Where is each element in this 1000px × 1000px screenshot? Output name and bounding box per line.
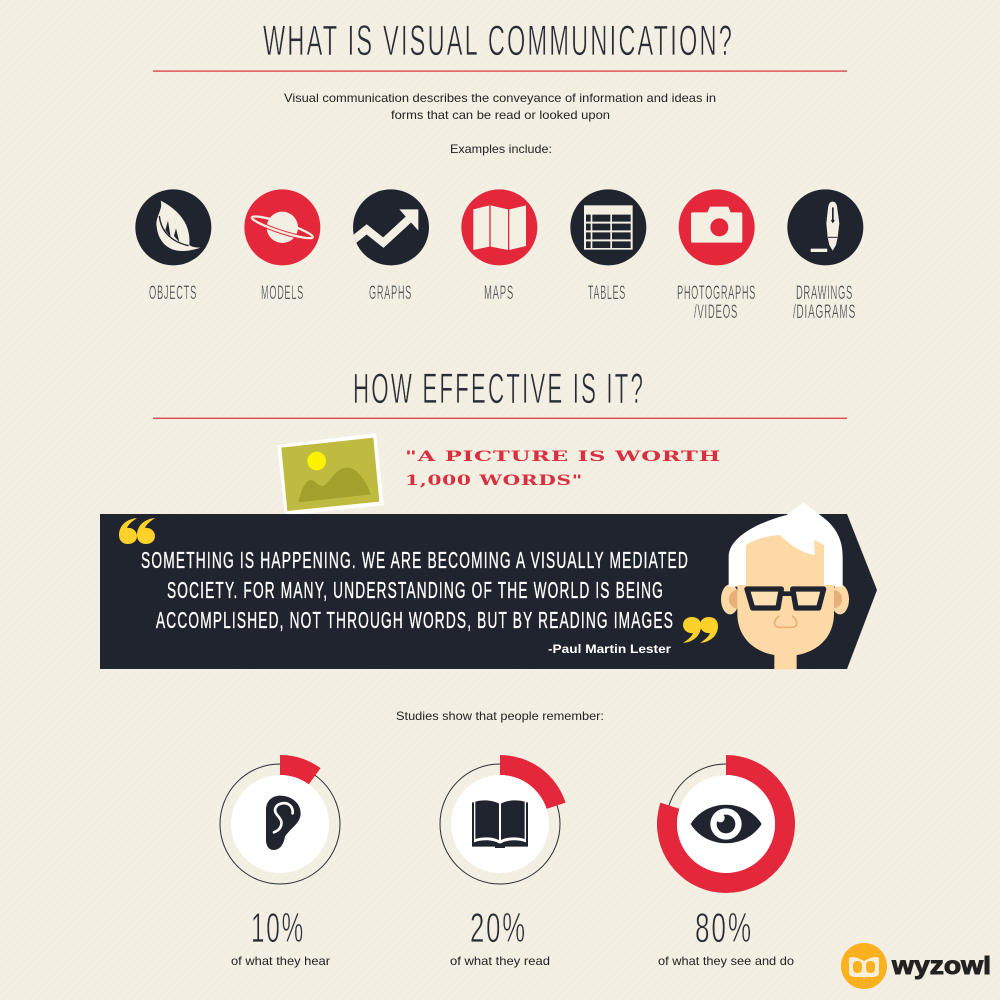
- icon: eye: [691, 805, 762, 843]
- intro text: Visual communication describes the conveyance of information and ideas in: [284, 91, 716, 105]
- icon: camera (photographs): [679, 189, 755, 265]
- icon labels: PHOTOGRAPHS: [677, 283, 756, 304]
- icon labels: /VIDEOS: [694, 302, 738, 323]
- percentage: 80%: [695, 904, 753, 951]
- section heading: HOW EFFECTIVE IS IT?: [353, 365, 645, 413]
- logo mark: [841, 943, 887, 989]
- icon labels: OBJECTS: [149, 283, 197, 304]
- picture icon: [277, 433, 384, 516]
- icon: closing quote marks: [683, 617, 718, 643]
- percentage: 10%: [251, 904, 305, 951]
- icon labels: /DIAGRAMS: [793, 302, 856, 323]
- attribution: -Paul Martin Lester: [548, 642, 671, 656]
- icon labels: DRAWINGS: [796, 283, 853, 304]
- icon: opening quote marks: [119, 518, 155, 544]
- icon: leaf (objects): [135, 189, 211, 265]
- stat: 20 percent: [440, 755, 566, 968]
- percentage: 20%: [470, 904, 527, 951]
- portrait: [721, 502, 849, 669]
- quote text: [141, 547, 689, 633]
- logo wordmark: wyzowl: [891, 952, 991, 980]
- icon: ear: [266, 796, 301, 850]
- intro text: [284, 91, 716, 122]
- stat: 10 percent: [220, 755, 340, 968]
- slab quote: 1,000 WORDS": [405, 473, 583, 489]
- icon: folded map (maps): [461, 189, 537, 265]
- icon labels: MODELS: [261, 283, 304, 304]
- icon: open book: [472, 800, 528, 848]
- icon labels: TABLES: [588, 283, 626, 304]
- slab quote: "A PICTURE IS WORTH: [405, 449, 721, 465]
- wyzowl logo: [841, 943, 991, 989]
- intro text: forms that can be read or looked upon: [391, 108, 610, 122]
- icon: table (tables): [570, 189, 646, 265]
- caption: of what they read: [450, 954, 550, 968]
- studies heading: Studies show that people remember:: [396, 709, 604, 723]
- icon labels: MAPS: [484, 283, 514, 304]
- examples heading: Examples include:: [450, 142, 552, 156]
- icon labels: [149, 283, 856, 323]
- icon: planet (models): [244, 189, 320, 265]
- stat: 80 percent: [657, 755, 795, 968]
- quote text: SOCIETY. FOR MANY, UNDERSTANDING OF THE WORLD IS BEING: [167, 577, 664, 603]
- icons row one: [135, 189, 537, 265]
- icon: pen (drawings): [787, 189, 863, 265]
- icons row two: [570, 189, 863, 265]
- slab quote: [405, 449, 721, 489]
- icon labels: GRAPHS: [369, 283, 412, 304]
- quote banner: [100, 502, 877, 669]
- caption: of what they hear: [231, 954, 330, 968]
- icon: rising arrow (graphs): [352, 189, 429, 265]
- caption: of what they see and do: [658, 954, 794, 968]
